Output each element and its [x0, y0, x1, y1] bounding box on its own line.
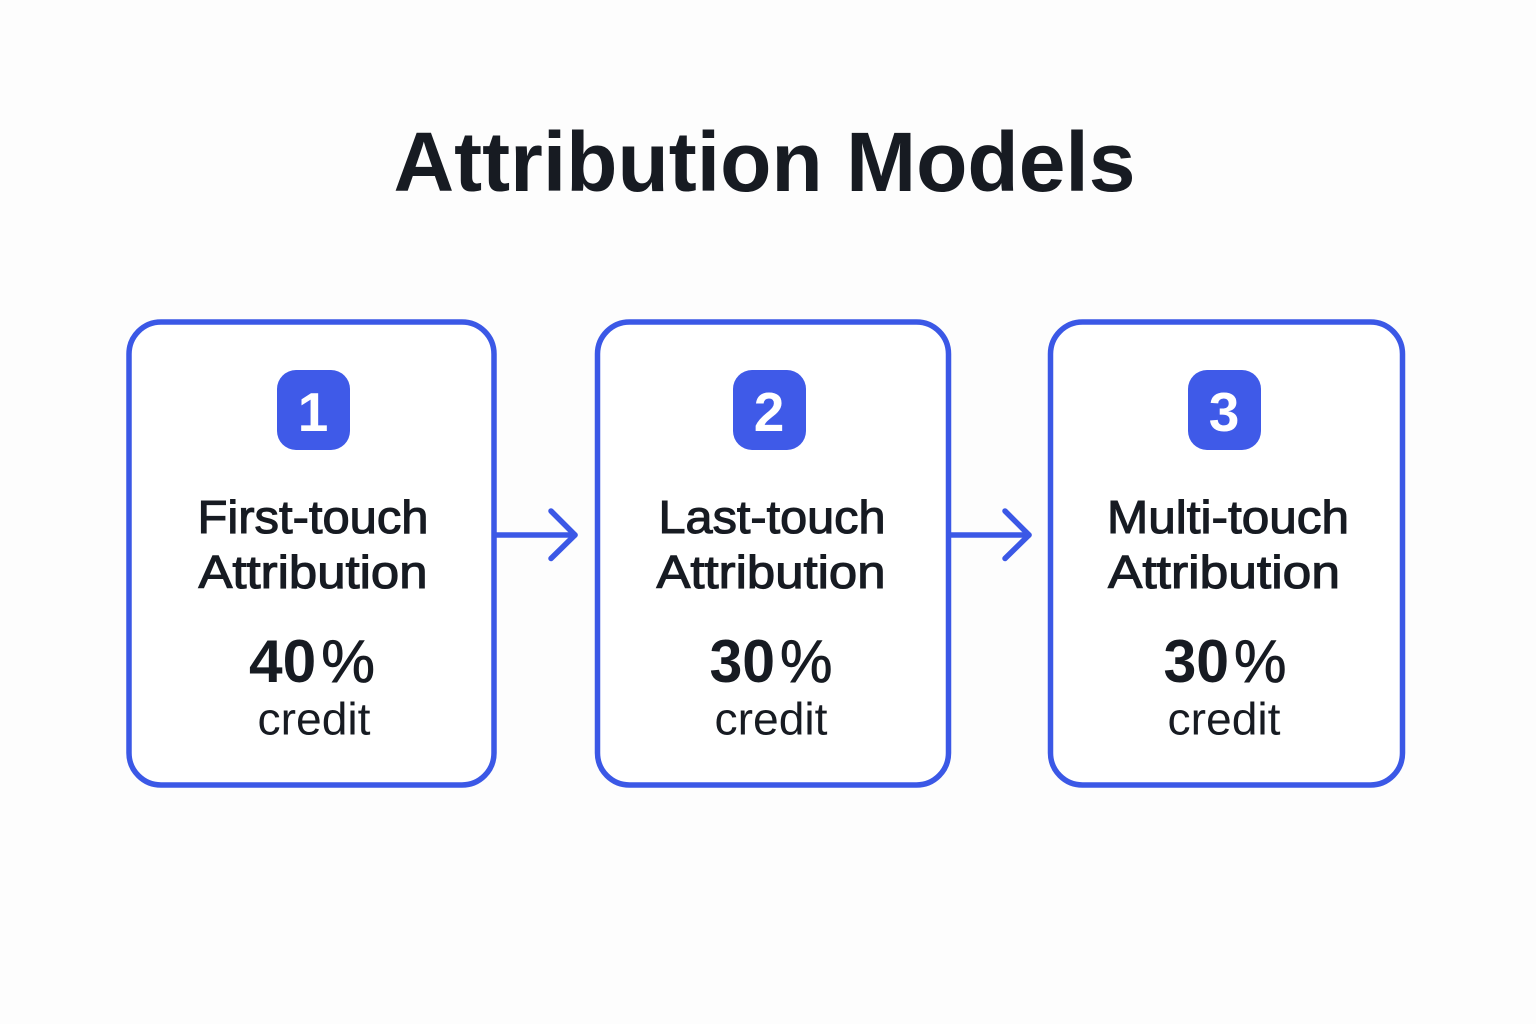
badge 2 — [733, 370, 806, 450]
arrow 2 — [950, 511, 1029, 558]
title: Attribution Models — [394, 115, 1136, 209]
heading — [656, 491, 886, 598]
panel: last-touch — [598, 322, 948, 785]
arrow 1 — [496, 511, 575, 558]
panel: first-touch — [129, 322, 494, 785]
heading — [198, 491, 428, 598]
heading: Attribution — [198, 546, 428, 598]
heading: Attribution — [656, 546, 886, 598]
badge 1: 1 — [298, 381, 328, 443]
badge 2: 2 — [754, 381, 784, 443]
heading: Last-touch — [658, 491, 886, 543]
label: credit — [1168, 694, 1281, 744]
value: 30% — [1164, 628, 1286, 695]
heading — [1107, 491, 1349, 598]
heading: Attribution — [1108, 546, 1340, 598]
value: 40% — [249, 628, 375, 695]
label: credit — [714, 694, 828, 744]
heading: Multi-touch — [1107, 491, 1349, 543]
heading: First-touch — [198, 491, 428, 543]
value: 30% — [710, 628, 832, 695]
badge 1 — [277, 370, 350, 450]
panel: multi-touch — [1050, 322, 1402, 785]
badge 3 — [1188, 370, 1261, 450]
badge 3: 3 — [1209, 381, 1239, 443]
label: credit — [258, 694, 371, 744]
